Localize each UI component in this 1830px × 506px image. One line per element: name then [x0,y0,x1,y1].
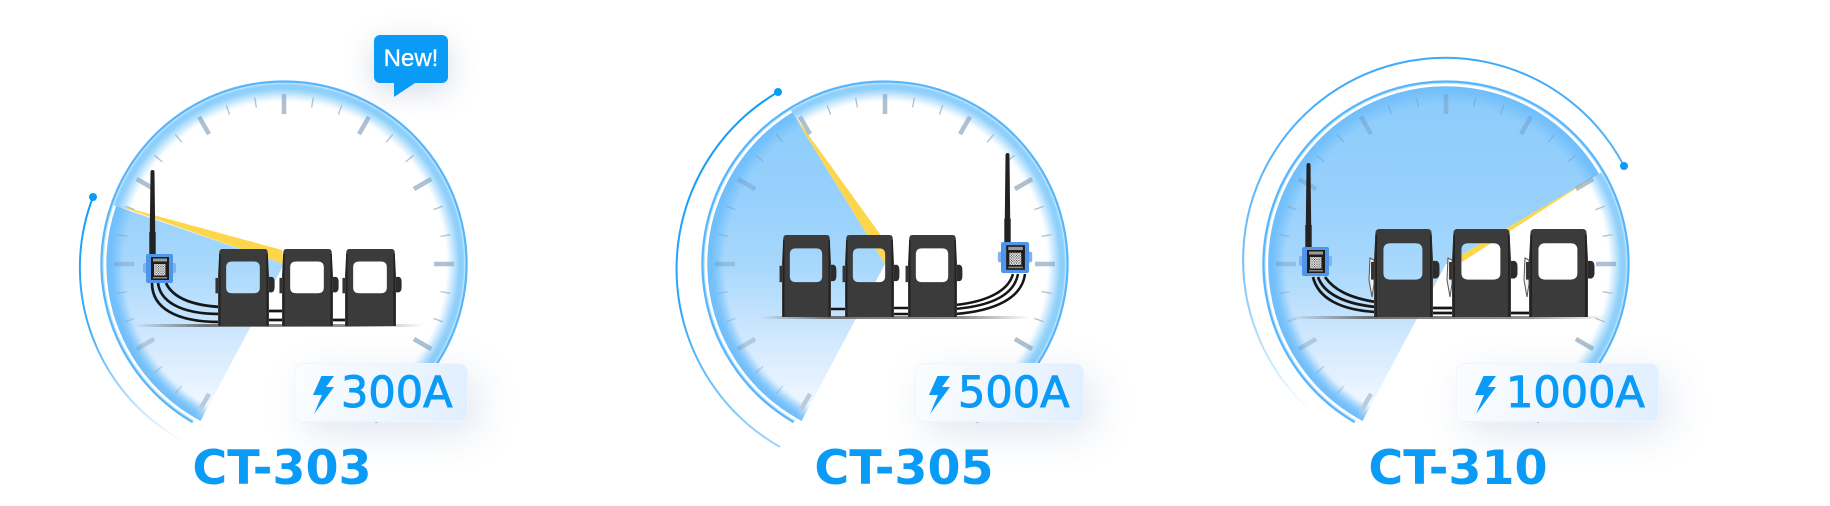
dial: CT-305 needle, wedge, ticks and rim [702,82,1068,422]
badge: 1000A: 1000A [1506,368,1645,418]
badge: 500A [915,363,1084,422]
device: CT-303 gateway and three clamps [143,170,402,326]
model name: CT-305 [814,441,994,496]
icon: lightning bolt [929,376,950,414]
ground shadow [760,316,1030,319]
device: CT-310 gateway and three clamps [1299,163,1594,317]
progress arc with end dot [80,193,187,443]
icon: lightning bolt [1475,376,1496,414]
device: CT-305 gateway and three clamps [780,153,1032,317]
callout: New!: New! [384,45,438,72]
panel: CT-303 gauge [78,30,488,496]
ground shadow [133,324,423,327]
badge: 300A [294,363,468,422]
dial: CT-303 needle, wedge, ticks and rim [101,82,466,422]
progress arc with end dot [677,88,782,447]
badge: 1000A [1456,363,1659,422]
progress arc with end dot [1243,58,1628,410]
model name: CT-310 [1368,441,1548,496]
callout: New! [374,35,448,83]
model name: CT-303 [192,441,372,496]
panel: CT-310 gauge [1242,56,1678,496]
badge: 500A: 500A [958,368,1070,418]
panel: CT-305 gauge [676,80,1104,496]
icon: lightning bolt [313,376,334,414]
ground shadow [1290,316,1607,319]
badge: 300A: 300A [341,368,452,418]
dial: CT-310 needle, wedge, ticks and rim [1264,82,1628,422]
